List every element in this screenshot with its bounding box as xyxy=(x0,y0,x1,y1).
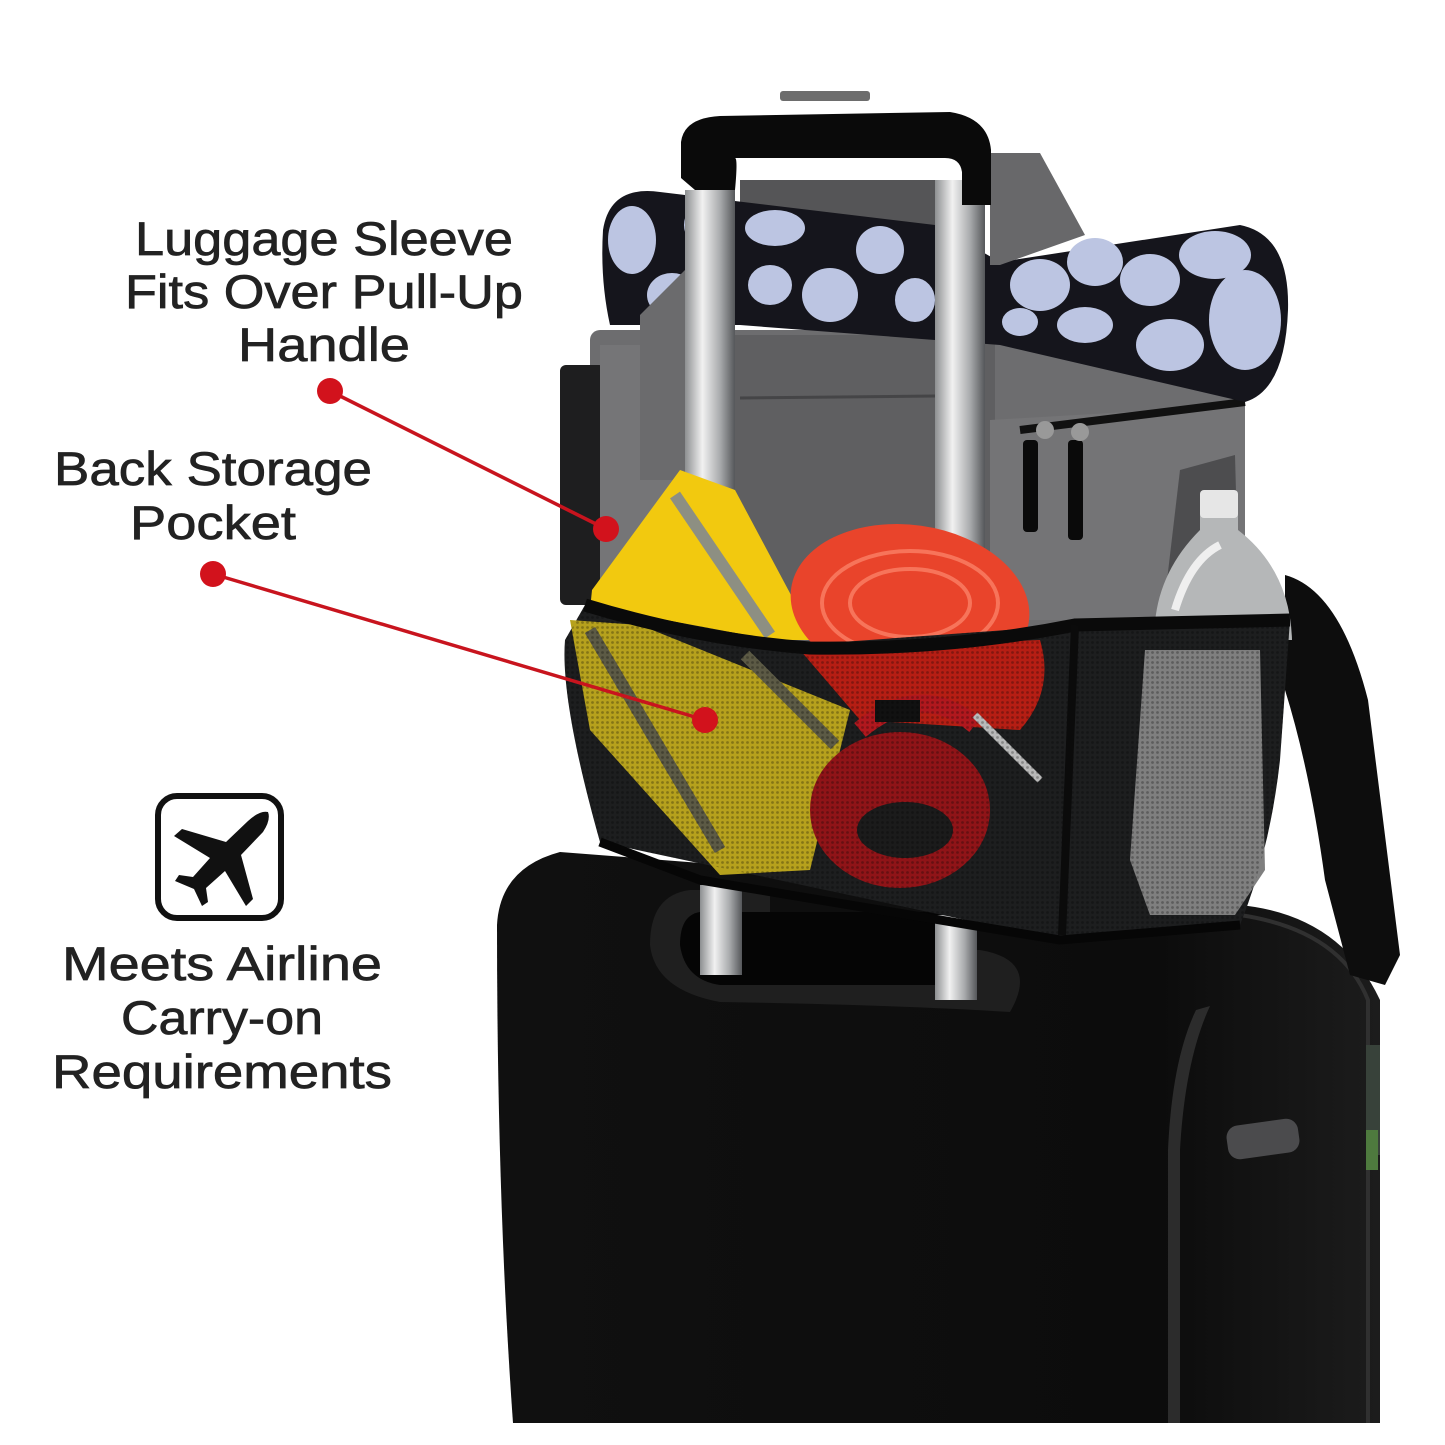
telescoping luggage handle xyxy=(681,91,991,1000)
zipper pulls xyxy=(1023,421,1089,540)
label: back storage pocket: Pocket xyxy=(130,496,296,549)
red leash xyxy=(810,700,1040,888)
yellow jacket behind mesh xyxy=(570,620,850,875)
label: back storage pocket: Back Storage xyxy=(54,442,372,495)
water bottle xyxy=(1155,490,1292,640)
label: luggage sleeve xyxy=(125,212,523,371)
callout line: back storage pocket xyxy=(200,561,718,733)
mesh pocket xyxy=(564,605,1290,940)
shoulder strap xyxy=(1285,575,1400,985)
label: airline carry-on: Requirements xyxy=(52,1045,392,1098)
label: luggage sleeve: Handle xyxy=(238,318,410,371)
bag body xyxy=(560,180,1245,655)
label: airline carry-on: Carry-on xyxy=(121,991,323,1044)
label: luggage sleeve: Luggage Sleeve xyxy=(135,212,513,265)
callout line: luggage sleeve xyxy=(317,378,619,542)
suitcase zipper tag xyxy=(1366,1045,1380,1170)
suitcase recessed handle xyxy=(650,890,1020,1012)
red frisbee xyxy=(780,509,1040,701)
icon: airplane in rounded square xyxy=(158,796,281,918)
label: airline carry-on xyxy=(52,937,392,1098)
yellow jacket xyxy=(590,470,815,640)
gray shoulder strap on top of blanket xyxy=(640,153,1085,480)
label: luggage sleeve: Fits Over Pull-Up xyxy=(125,265,523,318)
suitcase side badge xyxy=(1225,1117,1301,1161)
rolled blanket xyxy=(602,191,1288,402)
bottle behind mesh xyxy=(1130,650,1265,915)
suitcase xyxy=(497,852,1380,1423)
label: airline carry-on: Meets Airline xyxy=(62,937,382,990)
frisbee behind mesh xyxy=(800,640,1044,730)
label: back storage pocket xyxy=(54,442,372,549)
